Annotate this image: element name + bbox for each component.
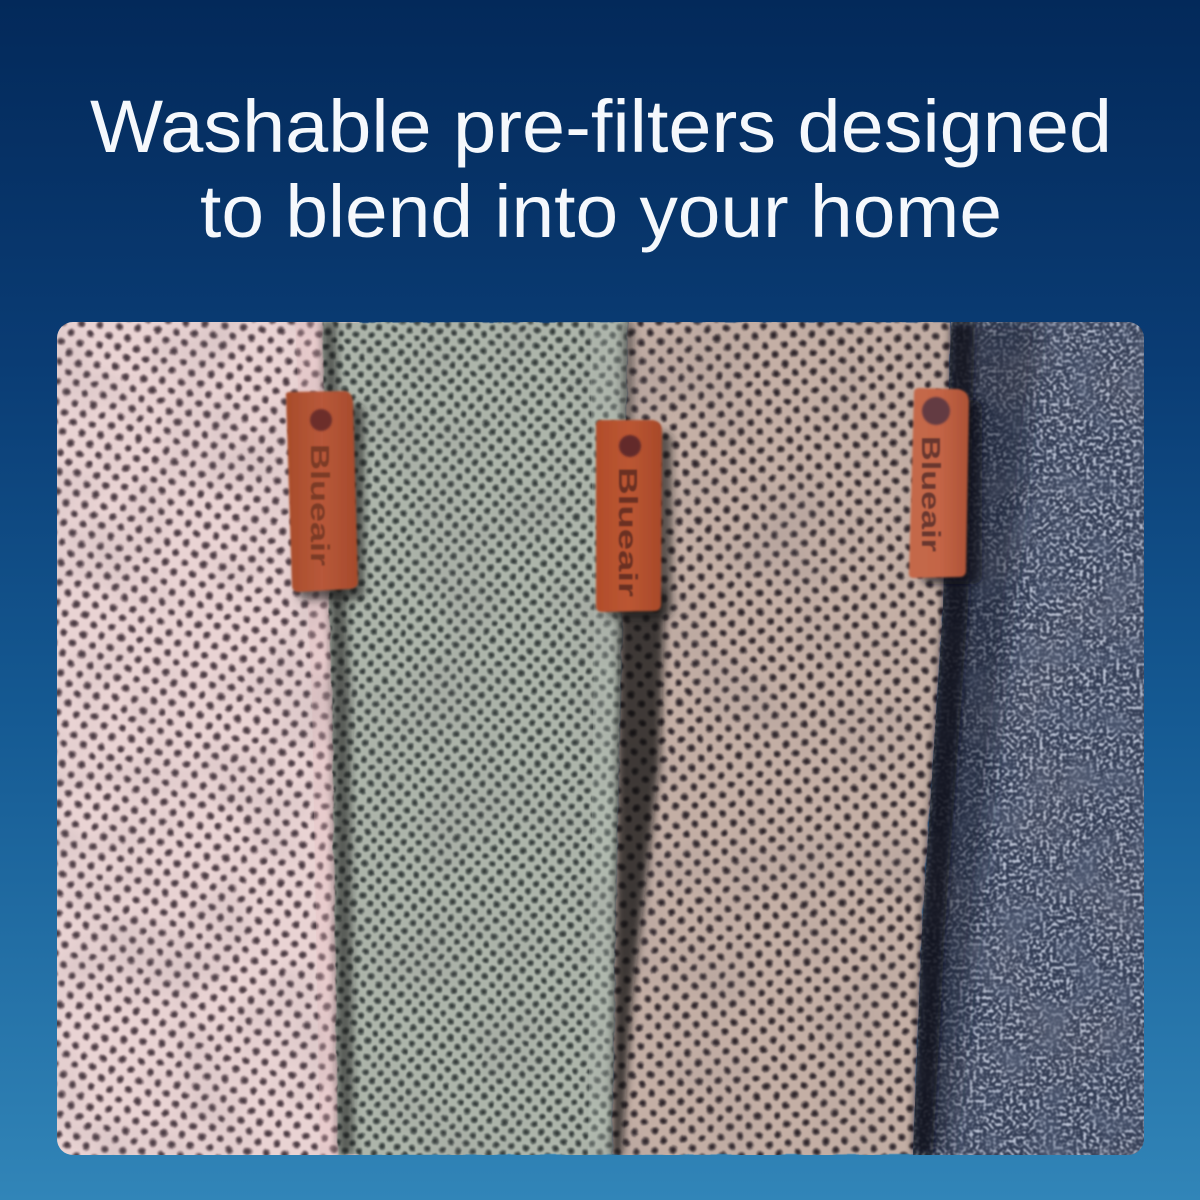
fabric: green [322, 322, 628, 1155]
fabric: navy [900, 320, 1150, 1160]
tag body [596, 420, 662, 612]
tag shadow [606, 432, 672, 618]
shadow: green to taupe [612, 590, 665, 1155]
fabric: taupe [612, 322, 951, 1155]
leather tag 3 [909, 388, 982, 584]
shadow: upper taupe fold [617, 322, 639, 421]
title [90, 85, 1112, 253]
pink seam band [295, 322, 338, 1155]
panel: fabric swatches [40, 300, 1150, 1180]
tag body [909, 388, 969, 578]
fold shadows between fabrics [322, 322, 975, 1155]
tag shadow [922, 400, 982, 584]
logo dot [922, 397, 950, 425]
navy upper left darkening [905, 322, 1040, 1155]
leather tag 1 [286, 391, 364, 600]
tag shadow [298, 404, 364, 600]
mottled tone over fabrics [50, 320, 920, 1160]
logo dot [619, 435, 641, 457]
logo text: Blueair [613, 467, 643, 597]
shadow: pink to green [322, 322, 354, 1155]
fabric: pink [57, 322, 360, 1155]
shadow: taupe to navy [913, 322, 975, 1155]
title: Washable pre-filters designed [90, 85, 1112, 168]
logo dot [310, 409, 332, 431]
leather tag 2 [596, 420, 672, 618]
title: to blend into your home [200, 170, 1002, 253]
logo text: Blueair [305, 444, 335, 566]
green side seam [588, 322, 628, 1155]
logo text: Blueair [916, 436, 946, 552]
tag body [286, 391, 358, 592]
